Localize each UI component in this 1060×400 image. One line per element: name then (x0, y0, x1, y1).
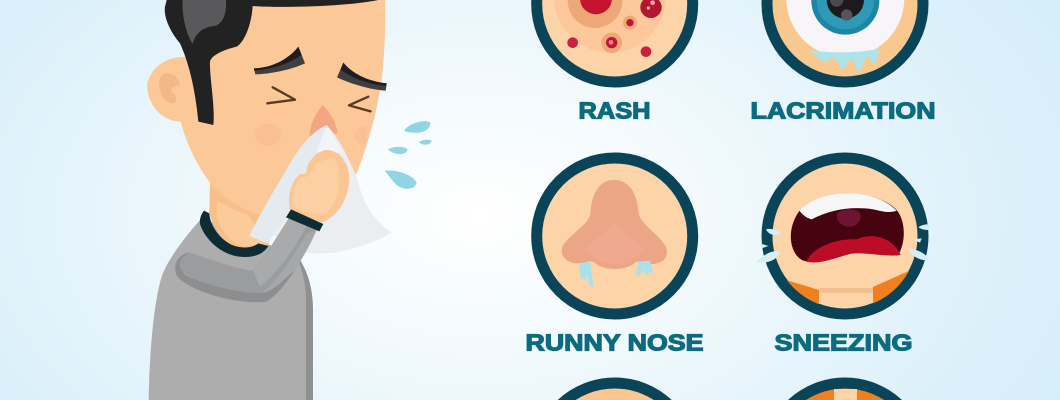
face (180, 0, 385, 215)
tears (811, 49, 879, 71)
panel: rash (537, 0, 693, 124)
rash badge (537, 0, 693, 82)
hair (165, 0, 378, 125)
hand (289, 150, 349, 223)
closed right eye (349, 97, 371, 111)
sneezing label: SNEEZING (774, 330, 912, 356)
sleeve arm (174, 217, 317, 302)
left eyebrow (254, 47, 305, 74)
panel: lower left badge (537, 383, 693, 400)
panel: sneezing (757, 158, 931, 356)
cuff (286, 209, 323, 231)
lacrimation label: LACRIMATION (750, 98, 936, 124)
nose (310, 105, 337, 137)
runny nose label: RUNNY NOSE (526, 330, 704, 356)
right eyebrow (337, 63, 387, 91)
panel: lower right badge (767, 383, 923, 400)
snot (579, 261, 594, 287)
rash label: RASH (578, 98, 650, 124)
nose badge (537, 158, 693, 314)
mouth badge (757, 158, 931, 330)
sleeve shading (175, 253, 295, 302)
sneeze spray (757, 224, 931, 263)
spray droplets (385, 121, 432, 189)
body sweater (149, 218, 313, 400)
closed left eye (267, 87, 295, 103)
ear (147, 57, 200, 122)
eye badge (767, 0, 923, 82)
panel: runny nose (526, 158, 704, 356)
sneezing man illustration (147, 0, 432, 400)
cheek blushes (255, 123, 368, 146)
collar (200, 211, 268, 257)
neck (209, 180, 277, 248)
tissue (249, 125, 392, 253)
panel: lacrimation (750, 0, 936, 124)
